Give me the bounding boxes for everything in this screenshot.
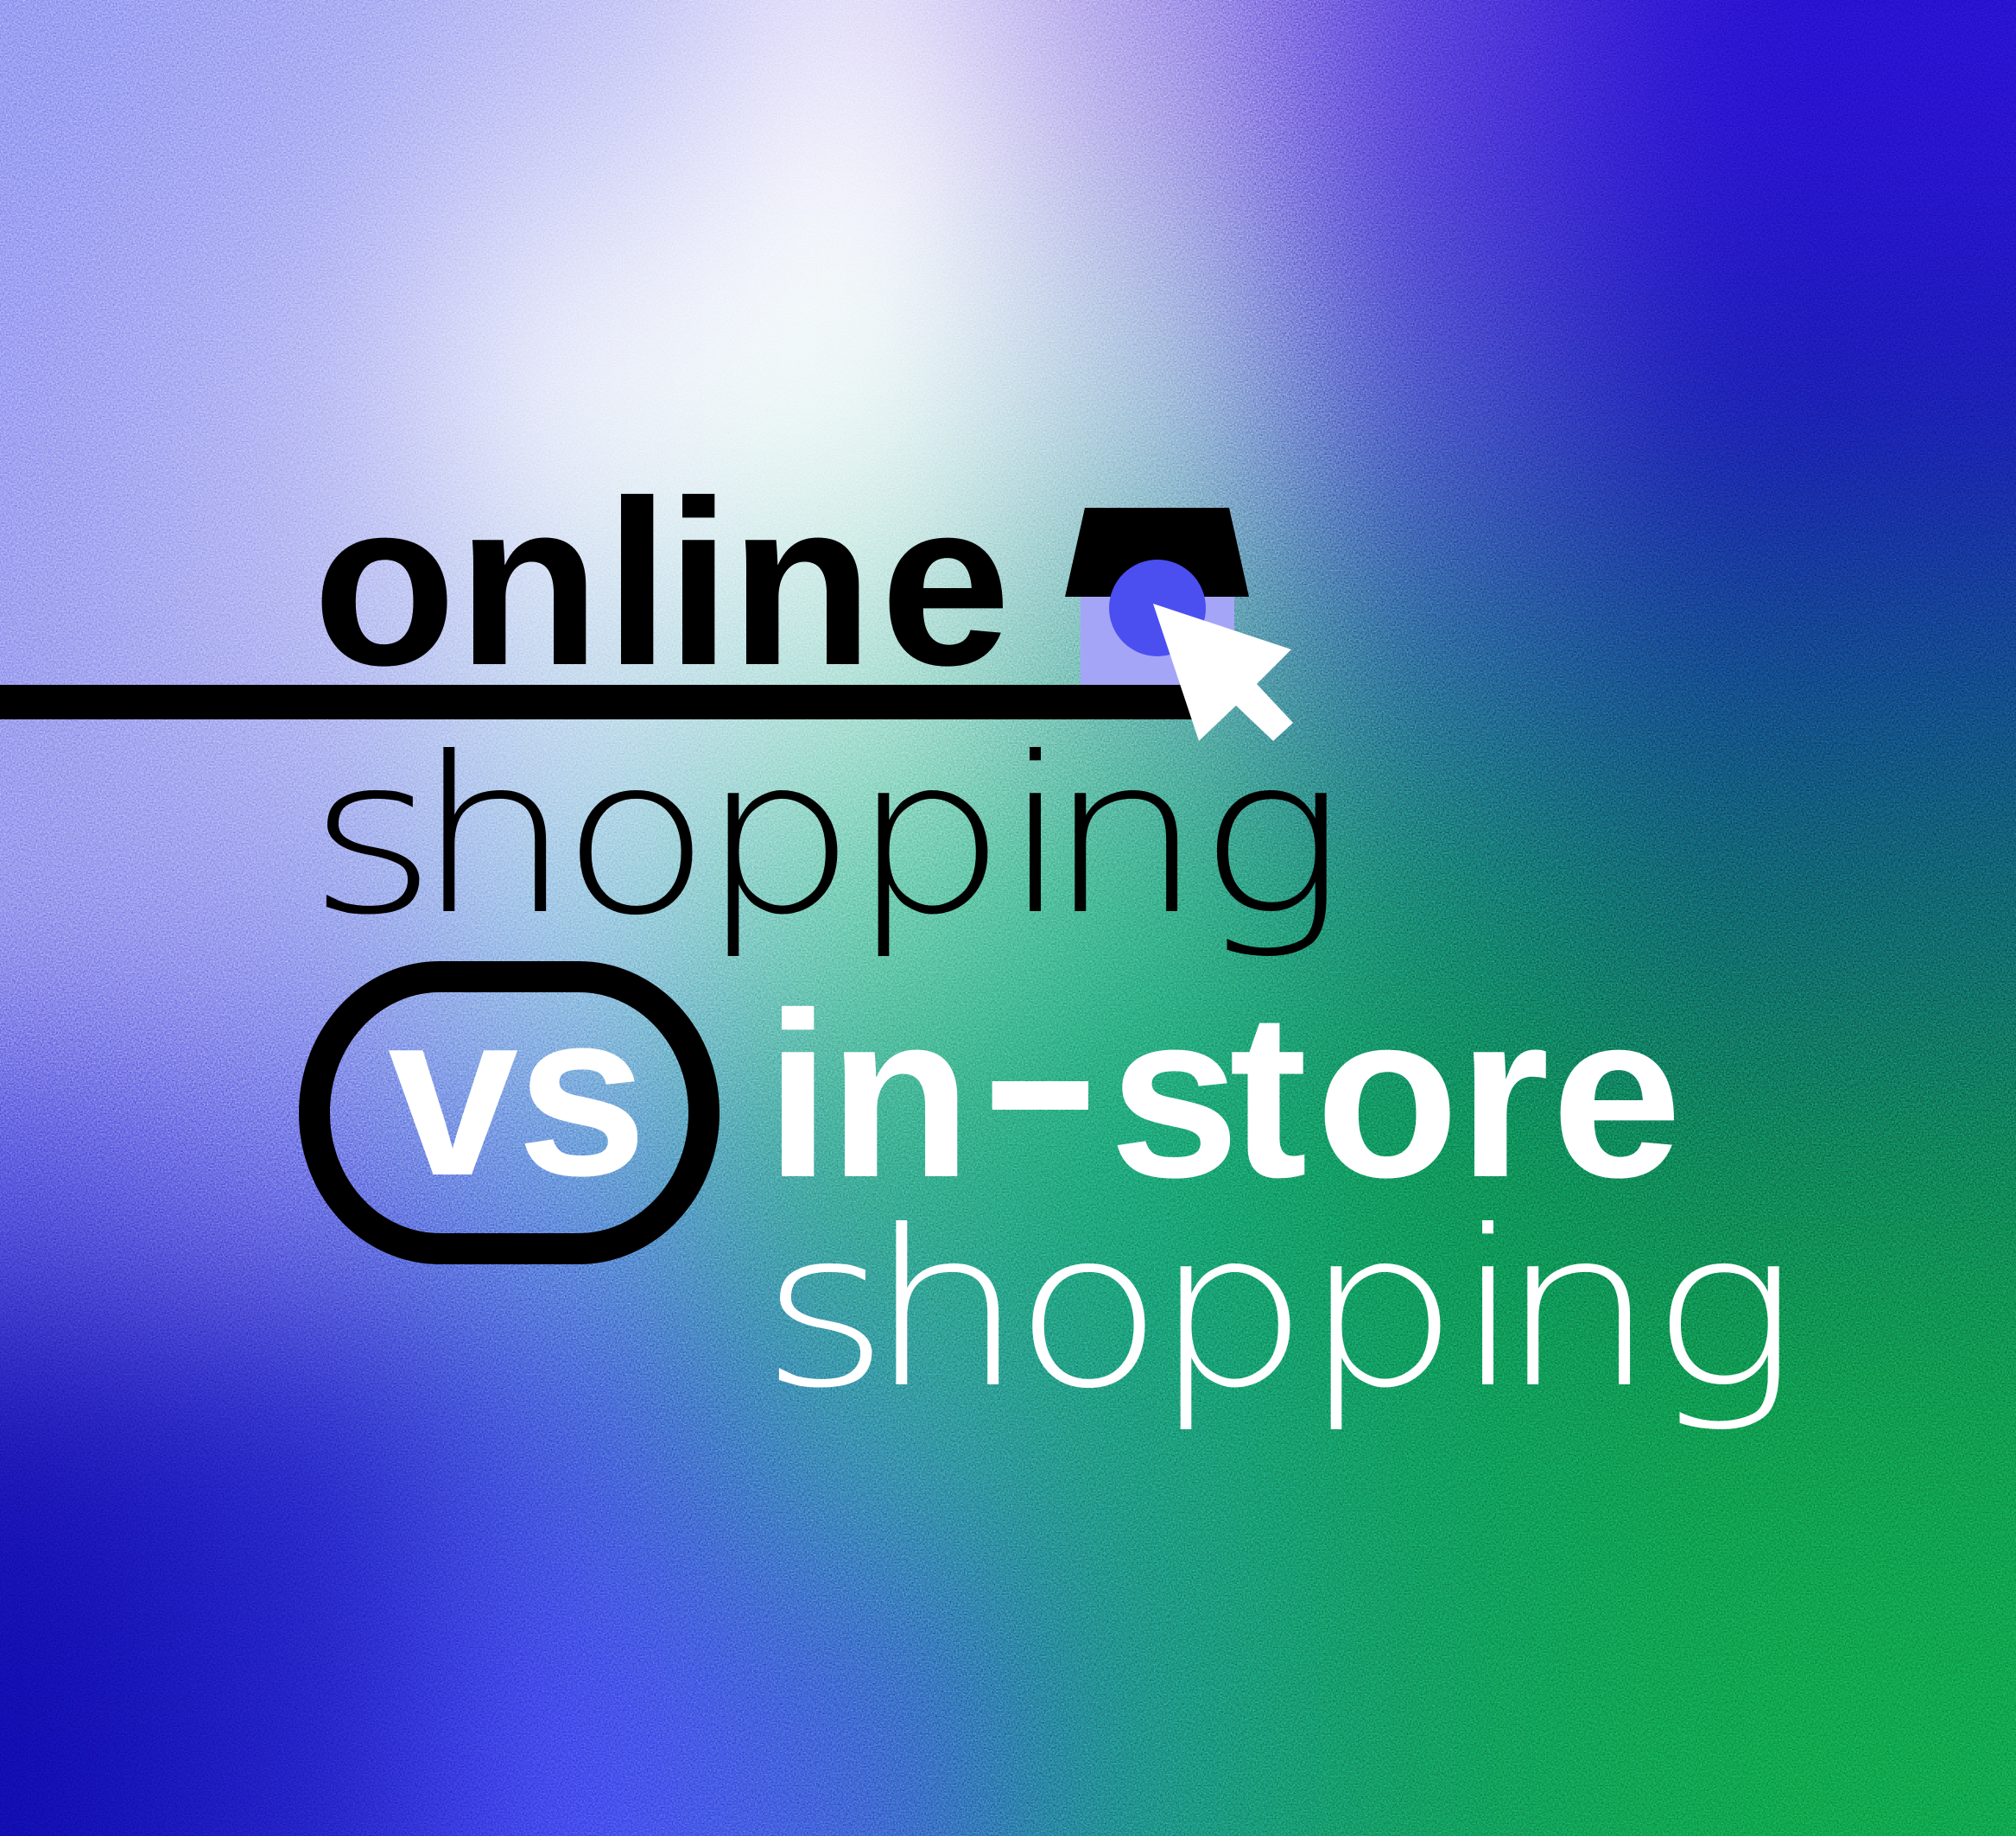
- vs label: vs: [388, 962, 647, 1225]
- badge outline: [314, 977, 704, 1249]
- vs badge: [314, 962, 704, 1249]
- store awning: [1065, 508, 1249, 597]
- subtitle word: shopping (white): shopping: [760, 1184, 1798, 1435]
- cursor arrow: [1153, 604, 1293, 741]
- underline bar: [0, 685, 1196, 719]
- subtitle word: shopping (black): shopping: [307, 711, 1346, 962]
- title word: online: online: [313, 452, 1011, 714]
- title word: in-store: in-store: [765, 944, 1682, 1226]
- hyphen extension: [992, 1081, 1088, 1110]
- store wall: [1081, 597, 1234, 685]
- icon: storefront with cursor: [1065, 508, 1293, 741]
- store door circle: [1109, 560, 1206, 656]
